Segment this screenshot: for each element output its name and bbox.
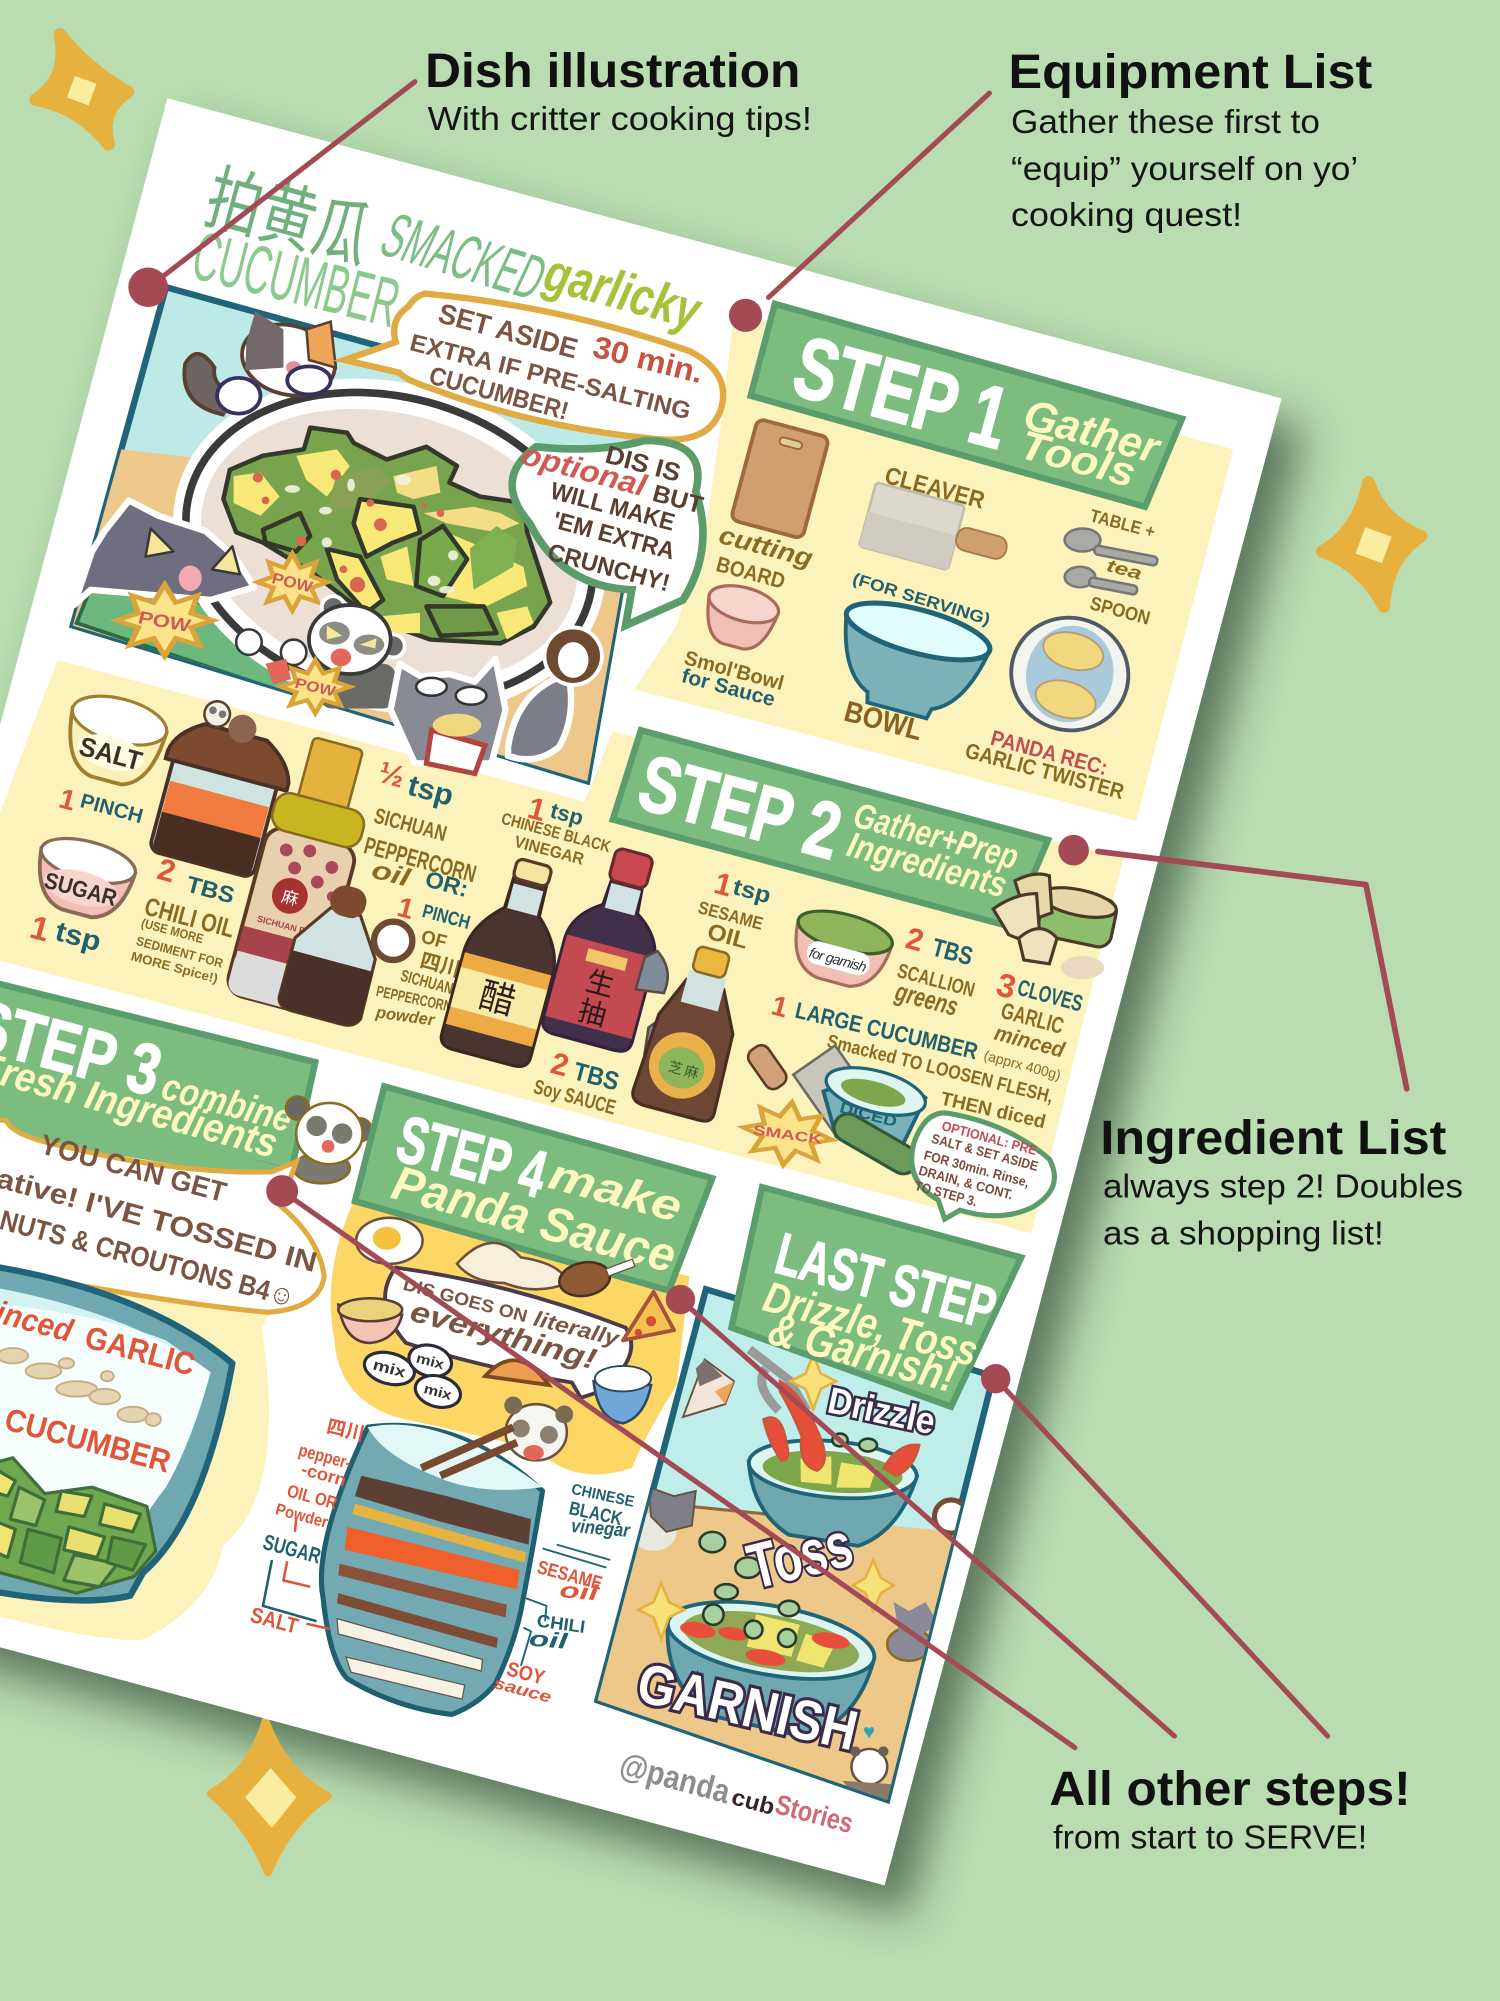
labels: right of cup: sauce xyxy=(492,1673,553,1707)
label: sugar amount: tsp xyxy=(52,915,104,957)
callout bubble: set aside 30 min: EXTRA IF PRE-SALTING xyxy=(407,329,694,425)
icon: hedgehog on bottle xyxy=(374,922,412,960)
labels: right of cup: SESAME xyxy=(535,1557,605,1595)
arrow: last step xyxy=(981,1364,1328,1736)
credit: pandacubstories: cub xyxy=(729,1783,778,1820)
callout bubble: goes on everything: DIS GOES ON xyxy=(401,1274,530,1326)
heading: step 4: make xyxy=(544,1150,687,1232)
credit: pandacubstories: Stories xyxy=(772,1789,857,1839)
callout bubble: set aside 30 min: SET ASIDE xyxy=(435,298,581,364)
icon: garlic twister xyxy=(999,605,1141,743)
sauce layer: sesame oil xyxy=(352,1504,526,1563)
heading: last step xyxy=(731,1187,1021,1407)
ingredient: peppercorn powder bottle xyxy=(277,876,393,1029)
icon: sparkle right xyxy=(1323,483,1421,606)
label: sichuan peppercorn: ½ xyxy=(375,755,408,795)
title: SMACKED xyxy=(371,200,557,313)
panel: step 2 ingredients background xyxy=(0,660,1123,1233)
icon: serving bowl xyxy=(825,591,995,730)
label: soy sauce: TBS xyxy=(570,1057,622,1096)
callout bubble: optional crunch xyxy=(512,437,706,626)
label: sesame oil: OIL xyxy=(705,918,751,954)
icon: cutting board xyxy=(731,419,829,539)
label: chinese black vinegar xyxy=(499,791,613,869)
label: table and tea spoon: TABLE + xyxy=(1088,505,1157,542)
label: salt amount: PINCH xyxy=(78,790,145,828)
label: salt amount xyxy=(56,783,145,828)
callout bubble: optional crunch: CRUNCHY! xyxy=(545,539,673,597)
callout: all other steps: All other steps! xyxy=(1049,1762,1411,1816)
label: chinese black vinegar: tsp xyxy=(548,798,586,830)
label: garlic cloves: minced xyxy=(992,1020,1068,1063)
label: sesame oil xyxy=(696,866,774,954)
label: sichuan peppercorn: PEPPERCORN xyxy=(361,832,479,888)
label: soy sauce: 2 xyxy=(547,1046,572,1083)
POW burst lower xyxy=(281,660,350,713)
label: bowl: BOWL xyxy=(841,695,926,747)
ingredient: sichuan pepper oil bottle: SICHUAN PEPPER xyxy=(256,914,336,944)
drizzle tongs xyxy=(749,1349,807,1411)
icon: hedgehog xyxy=(934,1500,968,1533)
ingredient: garlic cloves and minced bowl xyxy=(993,874,1119,979)
panel: last step illustration xyxy=(597,1289,993,1805)
label: sugar amount xyxy=(26,909,104,957)
callout bubble: optional pre-salt: SALT & SET ASIDE xyxy=(930,1131,1040,1174)
labels: right of cup: BLACK xyxy=(567,1498,624,1530)
labels: right of cup: CHINESE xyxy=(570,1481,636,1511)
SMACK burst: SMACK xyxy=(752,1123,824,1147)
panel: step 3 background blob xyxy=(0,1153,269,1640)
label: soy sauce: Soy SAUCE xyxy=(531,1076,618,1119)
heading: last step: LAST STEP xyxy=(769,1221,1003,1342)
callout: dish illustration xyxy=(425,44,812,138)
ingredient: black vinegar bottle: 醋 xyxy=(475,975,520,1023)
sauce layer: peppercorn xyxy=(337,1593,498,1648)
label: scallion greens: SCALLION xyxy=(895,960,977,1002)
icon: gray cat right xyxy=(887,1602,938,1661)
green salad mound xyxy=(74,593,290,686)
sauce layer: sugar xyxy=(337,1619,483,1671)
ingredient: salt bowl: SALT xyxy=(76,731,146,777)
illustration: smacking cucumber: DICED xyxy=(838,1099,899,1131)
label: minced garlic: GARLIC xyxy=(81,1319,199,1383)
callout: equipment list: Gather these first to xyxy=(1011,104,1320,141)
sauce layer: chili oil xyxy=(345,1527,520,1589)
icon: noodle bowl xyxy=(338,1298,402,1343)
heading: step 2 xyxy=(613,730,1048,927)
label: chinese black vinegar: 1 xyxy=(524,791,549,828)
icon: dumplings xyxy=(457,1243,568,1289)
label: scallion greens: 2 xyxy=(902,921,927,958)
heading: step 4: Panda Sauce xyxy=(387,1156,682,1283)
label: chinese black vinegar: VINEGAR xyxy=(512,832,586,869)
icon: raccoon eating popcorn xyxy=(391,659,571,774)
labels: left of cup: SALT xyxy=(248,1602,302,1639)
callout bubble: be creative: YOU CAN GET xyxy=(37,1129,230,1208)
arrow: ingredient list xyxy=(1058,835,1407,1089)
ingredient: scallion bowl xyxy=(785,903,897,994)
callout bubble: goes on everything xyxy=(385,1268,631,1398)
label: chili oil: SEDIMENT FOR xyxy=(135,933,225,971)
callout bubble: optional pre-salt: DRAIN, & CONT. xyxy=(917,1163,1015,1202)
ingredient: salt bowl xyxy=(57,687,172,792)
callout: equipment list: cooking quest! xyxy=(1011,197,1242,234)
icon: chicken leg xyxy=(557,1258,635,1300)
label: cleaver: CLEAVER xyxy=(882,462,988,515)
icon: panda waving xyxy=(843,1746,896,1805)
icon: panda hitting bowl xyxy=(236,596,405,708)
label: sichuan peppercorn: PINCH xyxy=(420,901,472,934)
labels: left of cup: OIL OR xyxy=(285,1481,340,1513)
label: sichuan peppercorn: SICHUAN xyxy=(399,966,455,998)
label: chili oil: TBS xyxy=(184,871,237,908)
callout bubble: optional crunch: optional xyxy=(518,437,651,504)
label: soy sauce xyxy=(531,1046,622,1119)
callout bubble: optional crunch: 'EM EXTRA xyxy=(550,507,678,565)
label: chili oil: CHILI OIL xyxy=(141,893,237,944)
callout bubble: set aside 30 min: 30 min. xyxy=(589,330,707,390)
step 3 mixing bowl xyxy=(0,1257,232,1600)
ingredient: black vinegar bottle xyxy=(439,851,580,1069)
illustration: smacking cucumber xyxy=(745,1042,930,1179)
label: panda recommendation: GARLIC TWISTER xyxy=(963,738,1127,804)
POW burst left: POW xyxy=(136,608,193,636)
icon: gray cat behind soy bottle xyxy=(636,951,677,1053)
ingredient: scallion bowl: for garnish xyxy=(808,944,869,975)
label: chili oil xyxy=(129,852,237,986)
recipe page xyxy=(0,98,1282,1885)
callout bubble: goes on everything: literally xyxy=(531,1306,622,1351)
sauce layer: soy sauce xyxy=(338,1564,507,1617)
label: chili oil: (USE MORE xyxy=(140,915,205,946)
label: cutting board: BOARD xyxy=(714,551,788,594)
icon: taco xyxy=(485,1360,549,1385)
icon: calico cat tail xyxy=(182,352,227,417)
callout: equipment list: Equipment List xyxy=(1009,45,1372,99)
icon: sparkle top left xyxy=(36,34,128,144)
sauce layer: salt xyxy=(346,1657,465,1699)
title: 拍黄瓜 xyxy=(198,158,379,278)
heading: step 3 xyxy=(0,965,315,1181)
icon: pizza slice xyxy=(623,1292,674,1340)
hearts: ♥ xyxy=(863,1722,875,1744)
label: large cucumber: (apprx 400g) xyxy=(982,1047,1063,1083)
icon: panda stirring with chopsticks xyxy=(421,1397,573,1476)
POW burst middle xyxy=(258,554,327,611)
label: large cucumber xyxy=(768,989,1063,1133)
labels: left of cup xyxy=(248,1417,366,1639)
arrow: equipment list xyxy=(729,93,989,332)
ingredient: sichuan pepper oil bottle: 麻 xyxy=(279,887,301,910)
label: panda recommendation xyxy=(963,725,1127,804)
ingredient: sugar bowl xyxy=(28,830,140,925)
ingredient: chili oil jar xyxy=(142,692,304,881)
callout: ingredient list xyxy=(1100,1111,1463,1253)
icon: cleaver xyxy=(858,482,1008,570)
callout: ingredient list: always step 2! Doubles xyxy=(1103,1168,1463,1205)
label: sichuan peppercorn: SICHUAN xyxy=(371,803,449,846)
table surface xyxy=(597,1501,957,1800)
ingredient: soy sauce bottle xyxy=(540,840,680,1054)
title: CUCUMBER xyxy=(185,217,407,342)
callout: equipment list: “equip” yourself on yo’ xyxy=(1011,151,1358,188)
ingredient: sugar bowl: SUGAR xyxy=(42,867,120,911)
cucumber slices flying xyxy=(700,1434,877,1616)
icon: panda peeking xyxy=(286,1097,372,1183)
SMACK burst xyxy=(739,1096,837,1171)
icon: calico cat peeking xyxy=(217,311,343,414)
label: scallion greens: greens xyxy=(891,976,961,1022)
label: sichuan peppercorn: powder xyxy=(374,1002,437,1030)
label: cutting board: cutting xyxy=(716,521,816,573)
ingredient: soy sauce bottle: 抽 xyxy=(575,995,610,1032)
ingredient: sesame oil bottle xyxy=(630,939,755,1123)
credit: pandacubstories: @panda xyxy=(616,1746,734,1811)
label: minced garlic xyxy=(0,1287,199,1383)
white sesame flecks xyxy=(285,475,458,594)
callout bubble: goes on everything: everything! xyxy=(407,1295,600,1376)
label: small bowl: Smol'Bowl xyxy=(682,647,786,695)
labels: left of cup: -corn xyxy=(299,1459,349,1490)
heading: step 1: STEP 1 xyxy=(784,318,1019,468)
icon: fried egg xyxy=(356,1218,423,1264)
ingredient: sichuan pepper oil bottle xyxy=(224,732,384,1016)
callout: all other steps xyxy=(1049,1762,1411,1856)
callout bubble: optional crunch: DIS IS xyxy=(602,441,684,488)
label: large cucumber: Smacked TO LOOSEN FLESH, xyxy=(825,1031,1055,1108)
heading: step 1: Tools xyxy=(1015,421,1140,496)
label: sichuan peppercorn: oil xyxy=(369,856,414,893)
icon: rice bowl xyxy=(594,1366,651,1423)
labels: right of cup: SOY xyxy=(504,1658,547,1690)
label: scallion greens xyxy=(891,921,977,1022)
label: large cucumber: LARGE CUCUMBER xyxy=(793,997,981,1064)
panel: dish illustration xyxy=(64,287,664,791)
label: sesame oil: tsp xyxy=(730,873,774,908)
icon: hedgehog xyxy=(543,626,604,687)
mix labels: mix xyxy=(422,1380,454,1403)
callout bubble: set aside 30 min: CUCUMBER! xyxy=(426,362,571,426)
panel: step 1 equipment background xyxy=(634,313,1233,821)
callout: ingredient list: Ingredient List xyxy=(1100,1111,1446,1165)
heading: step 3: combine xyxy=(157,1065,297,1141)
title: garlicky xyxy=(537,242,709,342)
table surface xyxy=(72,449,621,782)
label: chili oil: 2 xyxy=(154,852,179,889)
label: sichuan peppercorn: OF xyxy=(419,927,449,954)
heading: step 2: STEP 2 xyxy=(630,737,850,876)
label: sichuan peppercorn: PEPPERCORN xyxy=(374,983,453,1016)
mix labels: mix xyxy=(371,1357,408,1382)
icon: spoons xyxy=(1065,528,1158,595)
icon: sparkle bottom xyxy=(211,1721,328,1873)
credit: pandacubstories xyxy=(616,1746,857,1839)
callout: dish illustration: Dish illustration xyxy=(425,44,800,98)
labels: right of cup: oil xyxy=(528,1626,570,1654)
callout bubble: optional pre-salt: OPTIONAL: PRE- xyxy=(940,1118,1043,1159)
label: large cucumber: 1 xyxy=(768,989,791,1023)
label: garlic cloves: 3 xyxy=(992,966,1020,1007)
heading: step 2: Gather+Prep xyxy=(849,795,1023,877)
arrow: dish illustration xyxy=(128,82,415,307)
chili oil drizzle xyxy=(763,1381,919,1476)
diced cucumbers xyxy=(0,1458,156,1593)
label: garlic cloves xyxy=(992,966,1086,1063)
heading: step 1: Gather xyxy=(1019,391,1166,474)
garnish bowl xyxy=(652,1588,880,1747)
labels: left of cup: SUGAR xyxy=(260,1529,324,1569)
label: small bowl: for Sauce xyxy=(679,665,777,711)
POW burst lower: POW xyxy=(293,675,338,700)
label: drizzle: Drizzle xyxy=(824,1379,939,1442)
labels: right of cup: vinegar xyxy=(570,1516,632,1542)
heading: last step: Drizzle, Toss xyxy=(758,1273,983,1376)
label: chinese black vinegar: CHINESE BLACK xyxy=(499,809,613,856)
icon: small pink bowl xyxy=(698,579,783,655)
label: garlic cloves: CLOVES xyxy=(1015,974,1086,1016)
toss bowl xyxy=(742,1434,919,1550)
label: sichuan peppercorn xyxy=(361,755,479,1030)
icon: calico cat xyxy=(683,1360,734,1417)
label: sesame oil: SESAME xyxy=(696,897,765,934)
POW burst middle: POW xyxy=(270,569,315,596)
cucumber pile xyxy=(223,428,550,643)
ingredient: sesame oil bottle: 芝麻 xyxy=(667,1058,700,1082)
arrow: step 4 xyxy=(666,1285,1174,1736)
label: sichuan peppercorn: 四川 xyxy=(417,950,463,982)
ingredient: soy sauce bottle: 生 xyxy=(583,965,618,1002)
label: sichuan peppercorn: OR: xyxy=(423,866,471,902)
labels: left of cup: pepper- xyxy=(296,1440,353,1473)
label: table and tea spoon: tea xyxy=(1104,555,1144,584)
heading: step 2: Ingredients xyxy=(843,824,1011,905)
label: large cucumber: THEN diced xyxy=(938,1089,1048,1133)
POW burst left xyxy=(116,585,213,656)
label: toss: Toss xyxy=(740,1508,859,1603)
page shadow xyxy=(0,129,1305,1916)
heading: last step: & Garnish! xyxy=(763,1302,962,1402)
label: sugar amount: 1 xyxy=(26,909,53,949)
callout: all other steps: from start to SERVE! xyxy=(1053,1819,1367,1856)
icon: gray cat xyxy=(631,1487,696,1551)
label: sichuan peppercorn: tsp xyxy=(404,769,457,813)
callout bubble: optional pre-salt xyxy=(912,1113,1054,1219)
gray scratching cat xyxy=(74,500,254,605)
label: salt amount: 1 xyxy=(56,783,79,817)
labels: right of cup: CHILI xyxy=(536,1610,586,1637)
labels: left of cup: Powder xyxy=(273,1500,331,1532)
panel: step 4 sauce background blob xyxy=(331,1181,689,1474)
labels: right of cup: oil xyxy=(559,1577,600,1605)
label: panda recommendation: PANDA REC: xyxy=(988,725,1110,780)
labels: right of cup xyxy=(492,1481,636,1707)
label: cutting board xyxy=(716,531,813,588)
label: garlic cloves: GARLIC xyxy=(998,997,1067,1039)
mix labels xyxy=(361,1340,464,1412)
garlic bits xyxy=(0,1348,161,1426)
labels: left of cup: 四川 xyxy=(324,1417,366,1446)
callout bubble: be creative xyxy=(0,1111,324,1313)
callout bubble: optional crunch: BUT xyxy=(650,480,706,519)
label: table and tea spoon xyxy=(1088,505,1157,630)
chilli flecks on cucumber xyxy=(253,470,444,592)
sauce layer: black vinegar xyxy=(355,1476,531,1545)
wall trim xyxy=(638,1501,766,1514)
heading: step 4 xyxy=(355,1086,712,1291)
label: for serving: (FOR SERVING) xyxy=(850,569,993,629)
callout: equipment list xyxy=(1009,45,1372,234)
layered sauce cup xyxy=(321,1425,543,1714)
callout: ingredient list: as a shopping list! xyxy=(1103,1216,1384,1253)
callout bubble: optional pre-salt: FOR 30min. Rinse, xyxy=(922,1148,1031,1190)
callout bubble: optional crunch: WILL MAKE xyxy=(547,478,678,537)
icon: sparkles xyxy=(638,1354,894,1639)
heading: step 4: STEP 4 xyxy=(389,1102,554,1213)
callout bubble: optional pre-salt: TO STEP 3. xyxy=(913,1178,979,1209)
arrow: step 3 xyxy=(266,1175,1075,1748)
callout bubble: set aside 30 min xyxy=(345,294,723,440)
label: chili oil: MORE Spice!) xyxy=(129,948,220,986)
dish bowl xyxy=(173,378,604,712)
label: table and tea spoon: SPOON xyxy=(1088,593,1152,630)
title xyxy=(185,158,709,342)
callout: dish illustration: With critter cooking tips! xyxy=(428,101,812,138)
label: garnish: GARNISH xyxy=(632,1651,864,1762)
label: sesame oil: 1 xyxy=(711,866,736,903)
mix labels: mix xyxy=(415,1350,446,1372)
label: scallion greens: TBS xyxy=(929,934,976,971)
heading: step 1 xyxy=(751,304,1182,507)
label: sichuan peppercorn: 1 xyxy=(394,891,417,925)
